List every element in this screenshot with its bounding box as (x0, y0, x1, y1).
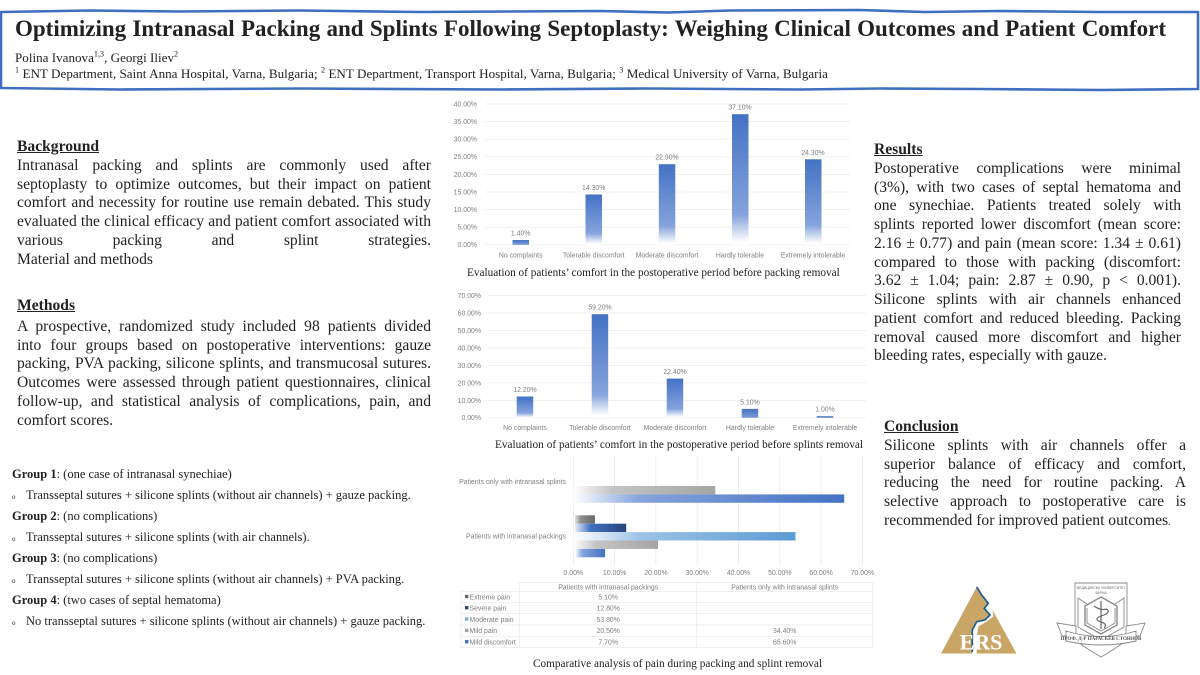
text: conclusion (884, 437, 1186, 529)
text: results: removal caused more discomfort and higher (874, 328, 1181, 346)
text: methods: into four groups based on postoperative interventions: gauze (17, 336, 431, 354)
caption: chart 3: Comparative analysis of pain during packing and splint removal (533, 658, 822, 670)
text: results (874, 160, 1181, 364)
chart: comfort before splints removal: 20.00% (458, 380, 481, 387)
panel: conclusion (884, 418, 1186, 529)
text: methods: follow-up, and statistical analysis of complications, pain, and (17, 393, 431, 410)
chart: comfort before splints removal: 1.00% (815, 406, 835, 414)
heading: results: Results (874, 141, 923, 158)
chart: comfort before splints removal: 60.00% (458, 310, 481, 317)
text: methods: A prospective, randomized study included 98 patients divided (17, 318, 431, 335)
chart: comfort before packing removal (454, 102, 850, 260)
chart: comfort before packing removal: 40.00% (454, 102, 477, 108)
data table: 53.80% (597, 617, 620, 624)
group 3: Group 3: (no complications) (12, 551, 157, 565)
logo: ERS (941, 586, 1016, 654)
group 1 detail: o (12, 493, 16, 501)
chart: pain during removal: 10.00% (603, 570, 626, 577)
chart: comfort before packing removal: 22.90% (655, 155, 679, 162)
text: conclusion: Silicone splints with air channels offer a (884, 437, 1186, 454)
data table: Moderate pain (470, 617, 514, 624)
heading: conclusion: Conclusion (884, 418, 959, 435)
text: results: compared to those with packing (discomfort: (874, 254, 1181, 270)
panel: methods (17, 297, 431, 428)
chart: pain during removal: Patients only with intranasal splints (459, 479, 567, 486)
data table: Severe pain (470, 606, 506, 612)
chart: comfort before packing removal: Moderate discomfort (636, 253, 698, 260)
chart: pain during removal: 70.00% (851, 570, 874, 577)
chart: comfort before packing removal: Hardly tolerable (716, 253, 764, 260)
data table: 5.10% (598, 594, 618, 602)
group 1 detail: Transseptal sutures + silicone splints (without air channels) + gauze packing. (26, 488, 411, 502)
logo: medical university crest (1056, 582, 1146, 658)
text: results: (3%), with two cases of septal hematoma and (874, 178, 1181, 196)
chart: comfort before packing removal: 37.10% (728, 105, 752, 112)
text: methods: comfort scores. (17, 412, 113, 428)
group 2: Group 2: (no complications) (12, 509, 157, 523)
heading: methods: Methods (17, 297, 75, 314)
chart: comfort before splints removal: No complaints (503, 425, 547, 432)
chart: comfort before splints removal (458, 293, 866, 432)
text: methods (17, 318, 431, 428)
text: background (17, 157, 431, 268)
chart: comfort before packing removal: 1.40% (511, 230, 530, 238)
panel: background (17, 138, 431, 268)
logo: medical university crest: ПРОФ. Д-Р ПАРАСКЕВ СТОЯНОВ (1061, 637, 1142, 642)
data table: Patients only with intranasal splints (731, 584, 839, 591)
text: background: evaluated the clinical efficacy and patient comfort associated with (17, 213, 431, 230)
data table (460, 582, 873, 648)
group 4: Group 4: (two cases of septal hematoma) (12, 593, 221, 607)
data table: 12.80% (597, 606, 620, 612)
group 1: Group 1: (one case of intranasal synechiae) (12, 467, 232, 481)
text: methods: packing, PVA packing, silicone splints, and transmucosal sutures. (17, 355, 431, 372)
caption: chart 2: Evaluation of patients’ comfort in the postoperative period before splints removal (495, 439, 863, 451)
group 3 detail: Transseptal sutures + silicone splints (without air channels) + PVA packing. (26, 572, 404, 586)
chart: comfort before packing removal: 10.00% (454, 207, 477, 214)
text: background: Intranasal packing and splints are commonly used after (17, 157, 431, 174)
group 4 detail: No transseptal sutures + silicone splints (without air channels) + gauze packing. (26, 614, 425, 628)
chart: comfort before packing removal: No complaints (499, 253, 543, 260)
chart: pain during removal: 0.00% (564, 570, 583, 577)
data table: Mild discomfort (470, 640, 516, 646)
text: results: bleeding rates, especially with gauze. (874, 347, 1107, 364)
chart: comfort before packing removal: 30.00% (454, 137, 477, 144)
text: results: 2.16 ± 0.77) and pain (mean score: 1.34 ± 0.61) (874, 235, 1181, 252)
group 4 detail: o (12, 619, 16, 627)
chart: comfort before packing removal: Extremely intolerable (781, 253, 845, 260)
chart: comfort before packing removal: 15.00% (454, 189, 477, 196)
panel: results (874, 141, 1181, 364)
chart: pain during removal: Patients with intranasal packings (466, 534, 567, 541)
text: background: various packing and splint strategies. (17, 232, 431, 249)
chart: comfort before splints removal: 10.00% (458, 398, 481, 405)
text: results: Postoperative complications were minimal (874, 160, 1181, 177)
group 2 detail: Transseptal sutures + silicone splints (with air channels). (26, 530, 310, 544)
chart: comfort before splints removal: Tolerable discomfort (569, 425, 631, 432)
heading: background: Background (17, 138, 99, 155)
text: results: patient comfort and reduced bleeding. Packing (874, 310, 1181, 327)
text: conclusion: reducing the need for routine packing. A (884, 474, 1186, 491)
data table: 7.70% (598, 640, 618, 646)
chart: comfort before packing removal: 35.00% (454, 119, 477, 126)
header border (0, 8, 1200, 92)
chart: comfort before splints removal: 30.00% (458, 363, 481, 370)
chart: comfort before splints removal: 50.00% (458, 328, 481, 335)
group 3 detail: o (12, 577, 16, 585)
chart: comfort before splints removal: 12.20% (513, 387, 537, 394)
logo: medical university crest: ВАРНА (1095, 591, 1107, 595)
chart: comfort before packing removal: Tolerable discomfort (563, 253, 625, 260)
data table: Extreme pain (470, 594, 510, 602)
text: background: comfort and necessity for routine use remain debated. This study (17, 194, 431, 211)
chart: pain during removal (459, 455, 874, 577)
chart: comfort before splints removal: 5.10% (740, 399, 760, 406)
chart: comfort before splints removal: 59.20% (588, 305, 612, 312)
chart: comfort before packing removal: 24.30% (801, 150, 825, 157)
chart: comfort before splints removal: Moderate discomfort (644, 425, 706, 432)
data table: Mild pain (470, 628, 497, 635)
chart: comfort before packing removal: 20.00% (454, 172, 477, 179)
data table: Patients with intranasal packings (558, 584, 659, 591)
chart: comfort before splints removal: 0.00% (461, 415, 481, 422)
chart: pain during removal: 60.00% (809, 570, 833, 577)
text: conclusion: superior balance of efficacy and comfort, (884, 456, 1186, 472)
chart: comfort before packing removal: 0.00% (457, 242, 477, 249)
text: results: Silicone splints with air channels enhanced (874, 291, 1181, 308)
text: methods: Outcomes were assessed through patient questionnaires, clinical (17, 374, 431, 391)
chart: comfort before splints removal: 22.40% (663, 369, 687, 376)
chart: comfort before splints removal: 40.00% (458, 345, 481, 352)
title: Optimizing Intranasal Packing and Splints Following Septoplasty: Weighing Clinical Outcomes and Patient Comfort (15, 16, 1166, 41)
chart: comfort before packing removal: 14.30% (582, 185, 605, 192)
data table: 34.40% (773, 628, 796, 635)
chart: pain during removal: 50.00% (768, 570, 791, 577)
text: conclusion: selective approach to postoperative care is (884, 493, 1186, 510)
text: conclusion: recommended for improved patient outcomes. (884, 512, 1170, 529)
chart: comfort before splints removal: Extremely intolerable (793, 425, 857, 432)
chart: comfort before splints removal: 70.00% (458, 293, 481, 300)
authors: Polina Ivanova1,3, Georgi Iliev2 (15, 50, 178, 65)
text: results: splints reported lower discomfort (mean score: (874, 216, 1181, 233)
text: results: 3.62 ± 1.04; pain: 2.87 ± 0.90, p < 0.001). (874, 272, 1181, 289)
chart: pain during removal: 20.00% (644, 570, 668, 577)
chart: comfort before splints removal: Hardly tolerable (726, 425, 774, 432)
chart: comfort before packing removal: 5.00% (457, 225, 477, 232)
affiliations: 1 ENT Department, Saint Anna Hospital, Varna, Bulgaria; 2 ENT Department, Transport Hospital, Varna, Bulgaria; 3 Medical University of Varna, Bulgaria (15, 66, 828, 81)
text: background: septoplasty to optimize outcomes, but their impact on patient (17, 176, 431, 192)
caption: chart 1: Evaluation of patients’ comfort in the postoperative period before packing removal (467, 267, 840, 279)
chart: pain during removal: 30.00% (686, 570, 709, 577)
header panel (0, 8, 1200, 92)
logo: medical university crest: МЕДИЦИНСКИ УНИВЕРСИТЕТ (1077, 586, 1125, 590)
group 2 detail: o (12, 535, 16, 543)
data table: 20.50% (597, 628, 620, 635)
data table: 65.60% (773, 640, 796, 646)
chart: comfort before packing removal: 25.00% (454, 154, 477, 161)
panel: groups (12, 467, 425, 628)
logo: ERS: ERS (960, 630, 1002, 654)
text: results: one synechiae. Patients treated solely with (874, 197, 1181, 214)
text: background: Material and methods (17, 250, 153, 268)
chart: pain during removal: 40.00% (727, 570, 750, 577)
